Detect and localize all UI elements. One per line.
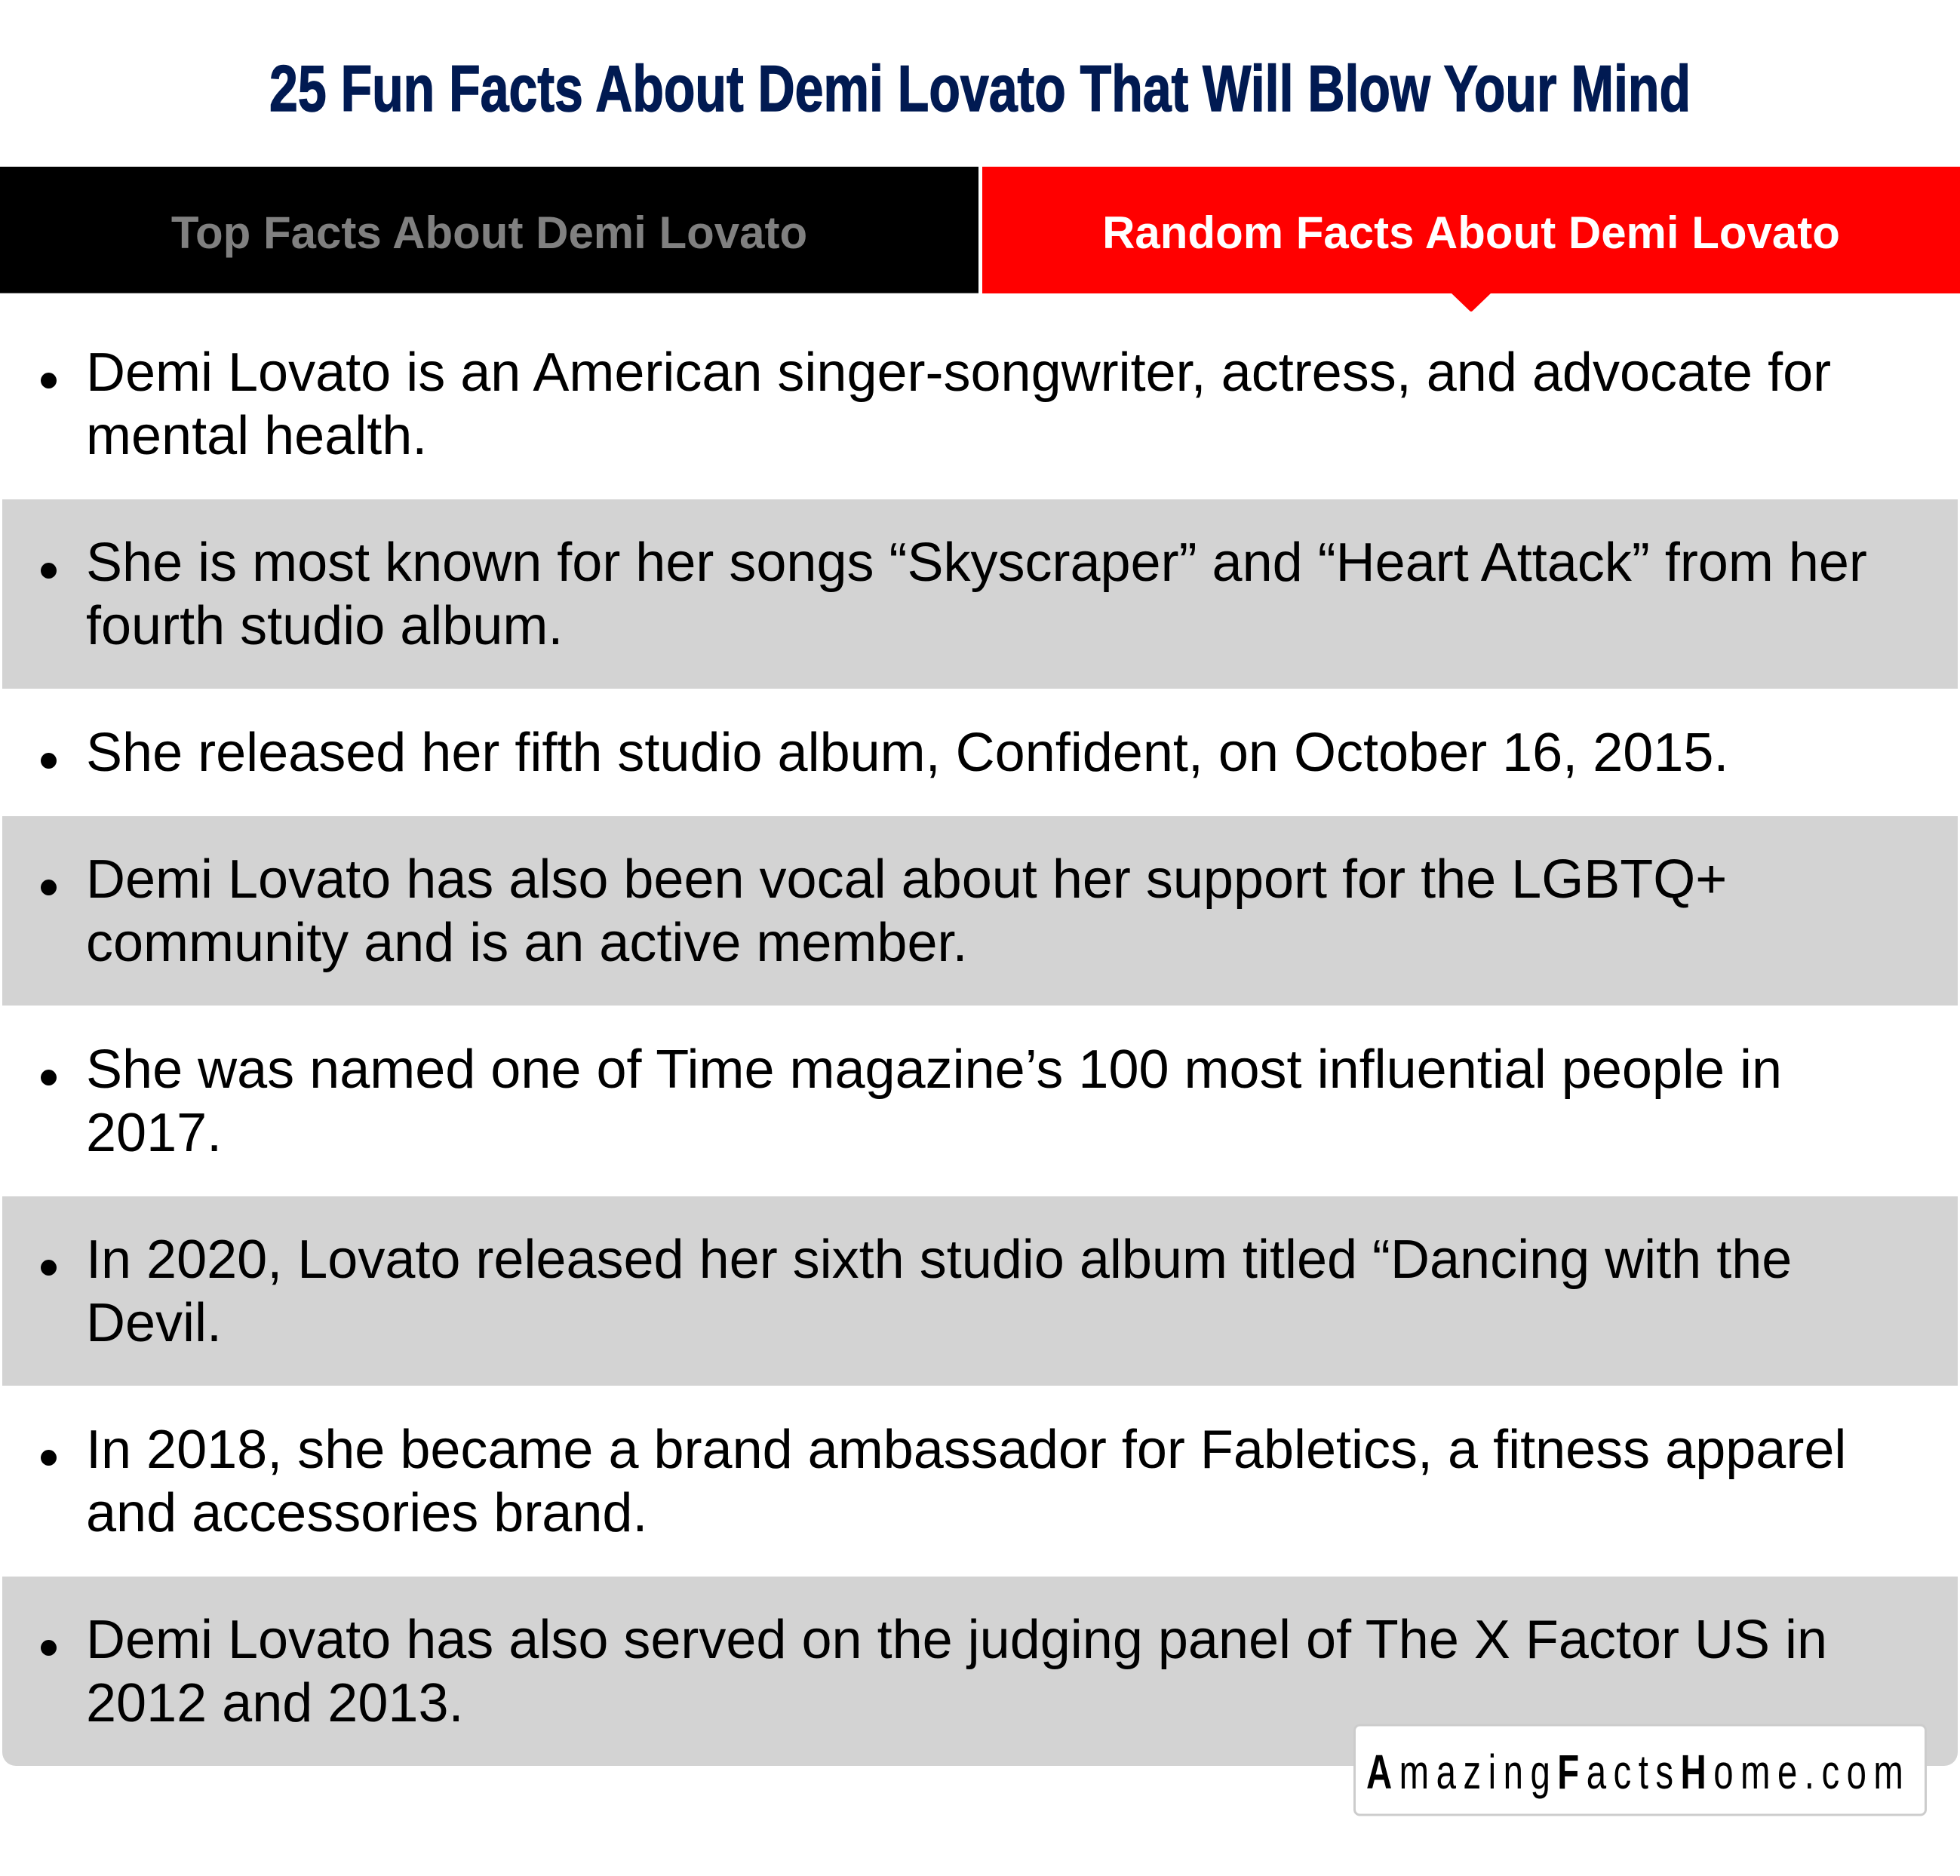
icon: active tab pointer — [1452, 293, 1491, 312]
fact 2 — [2, 499, 1958, 689]
tab: top facts: Top Facts About Demi Lovato — [171, 207, 807, 258]
fact 5 — [41, 1039, 1782, 1163]
watermark: AmazingFactsHome.com: AmazingFactsHome.com — [1366, 1745, 1903, 1799]
fact 7: and accessories brand. — [86, 1483, 647, 1543]
fact 4: Demi Lovato has also been vocal about her support for the LGBTQ+ — [86, 849, 1727, 910]
fact 6: In 2020, Lovato released her sixth studio album titled “Dancing with the — [86, 1230, 1792, 1290]
watermark: AmazingFactsHome.com — [1353, 1726, 1927, 1816]
tab: random facts: Random Facts About Demi Lovato — [1102, 207, 1840, 258]
fact 5: 2017. — [86, 1103, 222, 1163]
fact 3: She released her fifth studio album, Confident, on October 16, 2015. — [86, 723, 1728, 783]
fact 4 — [2, 816, 1958, 1006]
fact 4: community and is an active member. — [86, 913, 967, 973]
fact 2: fourth studio album. — [86, 596, 563, 656]
fact 8: Demi Lovato has also served on the judging panel of The X Factor US in — [86, 1610, 1827, 1670]
fact 6 — [2, 1196, 1958, 1386]
fact 6: Devil. — [86, 1293, 222, 1353]
tab: top facts — [0, 167, 978, 293]
fact 8 — [2, 1577, 1958, 1766]
fact 2: She is most known for her songs “Skyscraper” and “Heart Attack” from her — [86, 533, 1867, 593]
fact 1 — [41, 342, 1831, 466]
tab: random facts — [982, 167, 1960, 293]
fact 7: In 2018, she became a brand ambassador for Fabletics, a fitness apparel — [86, 1420, 1846, 1480]
fact 5: She was named one of Time magazine’s 100 most influential people in — [86, 1039, 1782, 1100]
fact 7 — [41, 1420, 1846, 1543]
fact 8: 2012 and 2013. — [86, 1673, 463, 1733]
fact 1: mental health. — [86, 406, 427, 466]
fact 1: Demi Lovato is an American singer-songwriter, actress, and advocate for — [86, 342, 1831, 403]
